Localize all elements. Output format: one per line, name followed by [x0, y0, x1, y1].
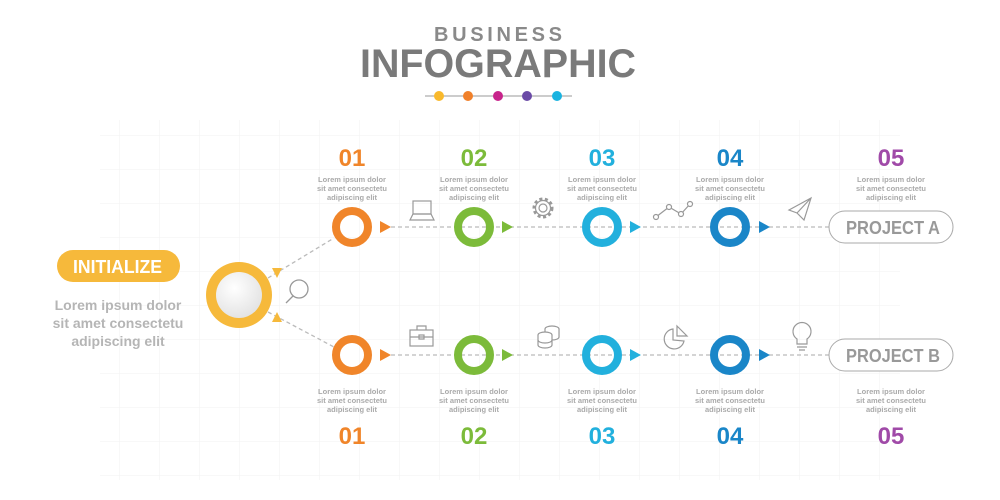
top descriptions: Lorem ipsum dolor: [857, 175, 925, 184]
title: [360, 24, 636, 101]
initialize description: [53, 297, 183, 349]
bottom descriptions: [317, 387, 926, 414]
bottom numbers: 04: [717, 423, 744, 450]
start circle: [206, 262, 282, 328]
bottom descriptions: Lorem ipsum dolor: [568, 387, 636, 396]
icon: light bulb: [793, 323, 811, 350]
bottom descriptions: sit amet consectetu: [439, 396, 509, 405]
project A: [829, 211, 953, 243]
bottom descriptions: Lorem ipsum dolor: [440, 387, 508, 396]
icon: coins: [538, 326, 559, 348]
icon: pie chart: [664, 326, 687, 349]
top numbers: 01: [339, 145, 365, 172]
bottom descriptions: sit amet consectetu: [317, 396, 387, 405]
bottom descriptions: adipiscing elit: [705, 405, 756, 414]
icon: gear: [534, 199, 552, 217]
top descriptions: adipiscing elit: [449, 193, 500, 202]
initialize label: [57, 250, 180, 282]
top numbers: [339, 145, 904, 172]
title: INFOGRAPHIC: [360, 42, 636, 86]
bottom numbers: 03: [589, 423, 615, 450]
bottom numbers: 05: [878, 423, 904, 450]
top descriptions: adipiscing elit: [577, 193, 628, 202]
bottom descriptions: sit amet consectetu: [856, 396, 926, 405]
initialize description: adipiscing elit: [71, 333, 165, 349]
bottom descriptions: adipiscing elit: [577, 405, 628, 414]
top descriptions: sit amet consectetu: [695, 184, 765, 193]
top descriptions: Lorem ipsum dolor: [568, 175, 636, 184]
top descriptions: sit amet consectetu: [856, 184, 926, 193]
icon: magnifier: [286, 280, 308, 303]
bottom descriptions: sit amet consectetu: [695, 396, 765, 405]
project B: [829, 339, 953, 371]
bottom numbers: 02: [461, 423, 487, 450]
top numbers: 03: [589, 145, 615, 172]
top numbers: 04: [717, 145, 744, 172]
icon: briefcase: [410, 326, 433, 346]
top numbers: 02: [461, 145, 487, 172]
initialize description: sit amet consectetu: [53, 315, 183, 331]
top descriptions: Lorem ipsum dolor: [696, 175, 764, 184]
top descriptions: sit amet consectetu: [439, 184, 509, 193]
bottom descriptions: Lorem ipsum dolor: [696, 387, 764, 396]
bottom numbers: [339, 423, 904, 450]
bottom descriptions: adipiscing elit: [327, 405, 378, 414]
icon: paper plane: [789, 198, 811, 220]
top row nodes: [336, 211, 770, 243]
bottom row nodes: [336, 339, 770, 371]
top descriptions: sit amet consectetu: [317, 184, 387, 193]
bottom numbers: 01: [339, 423, 365, 450]
initialize label: INITIALIZE: [73, 257, 162, 277]
icon: line chart: [654, 202, 692, 220]
connectors: [268, 227, 829, 355]
bottom descriptions: Lorem ipsum dolor: [857, 387, 925, 396]
top descriptions: adipiscing elit: [327, 193, 378, 202]
top descriptions: adipiscing elit: [705, 193, 756, 202]
project B: PROJECT B: [846, 346, 940, 366]
bottom descriptions: sit amet consectetu: [567, 396, 637, 405]
top descriptions: Lorem ipsum dolor: [440, 175, 508, 184]
title: BUSINESS: [434, 24, 562, 46]
bottom descriptions: adipiscing elit: [449, 405, 500, 414]
top descriptions: sit amet consectetu: [567, 184, 637, 193]
top descriptions: Lorem ipsum dolor: [318, 175, 386, 184]
initialize description: Lorem ipsum dolor: [55, 297, 182, 313]
project A: PROJECT A: [846, 218, 940, 238]
top descriptions: adipiscing elit: [866, 193, 917, 202]
top descriptions: [317, 175, 926, 202]
icon: laptop: [410, 201, 434, 220]
bottom descriptions: adipiscing elit: [866, 405, 917, 414]
bottom descriptions: Lorem ipsum dolor: [318, 387, 386, 396]
top numbers: 05: [878, 145, 904, 172]
